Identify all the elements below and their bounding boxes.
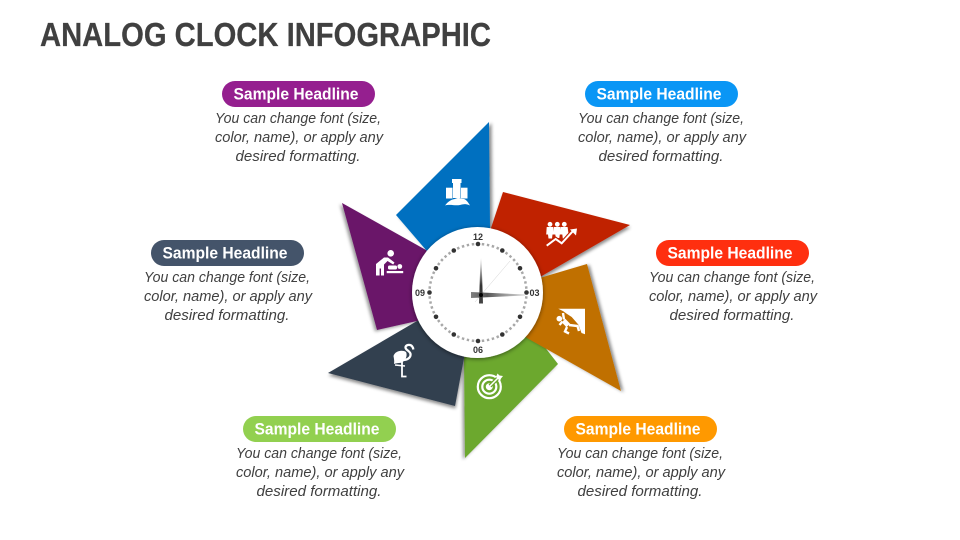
description: desired formatting. bbox=[236, 148, 360, 165]
callout: middle left bbox=[144, 240, 313, 324]
clock numerals bbox=[415, 232, 540, 355]
description: You can change font (size, bbox=[144, 269, 310, 286]
clock numerals: 03 bbox=[529, 288, 540, 298]
description: desired formatting. bbox=[598, 148, 724, 165]
description bbox=[144, 269, 313, 324]
callout: bottom left: Sample Headline bbox=[254, 420, 380, 438]
headline pill bbox=[564, 416, 717, 442]
clock face bbox=[412, 227, 543, 358]
icon: flamingo bbox=[394, 345, 413, 376]
description: color, name), or apply any bbox=[144, 288, 313, 305]
description bbox=[557, 445, 726, 500]
description: You can change font (size, bbox=[236, 445, 402, 462]
callout: middle right bbox=[649, 240, 818, 324]
description: You can change font (size, bbox=[215, 110, 381, 127]
title: ANALOG CLOCK INFOGRAPHIC bbox=[40, 16, 491, 53]
headline pill bbox=[656, 240, 809, 266]
description: You can change font (size, bbox=[557, 445, 723, 462]
panel: navy wedge bbox=[328, 293, 478, 406]
description: You can change font (size, bbox=[649, 269, 815, 286]
panel: purple wedge bbox=[342, 203, 478, 330]
description: You can change font (size, bbox=[578, 110, 744, 127]
minute ticks bbox=[430, 244, 526, 341]
callout: bottom right bbox=[557, 416, 726, 500]
center pin bbox=[479, 293, 483, 297]
description: color, name), or apply any bbox=[578, 129, 747, 146]
callout: top right: Sample Headline bbox=[596, 84, 722, 104]
hour dots bbox=[427, 242, 529, 343]
panel: red wedge bbox=[478, 192, 630, 293]
callout: top left: Sample Headline bbox=[234, 84, 358, 104]
callout: bottom right: Sample Headline bbox=[576, 420, 700, 438]
description: color, name), or apply any bbox=[215, 129, 384, 146]
description bbox=[215, 110, 384, 165]
icon: target with arrow bbox=[478, 374, 503, 398]
callout: top right bbox=[578, 81, 747, 165]
headline pill bbox=[585, 81, 738, 107]
icon: parent changing baby bbox=[376, 250, 403, 276]
description: desired formatting. bbox=[256, 483, 382, 500]
description: color, name), or apply any bbox=[557, 464, 726, 481]
headline pill bbox=[151, 240, 304, 266]
panel: green wedge bbox=[464, 293, 558, 458]
description: desired formatting. bbox=[578, 483, 702, 500]
description: color, name), or apply any bbox=[236, 464, 405, 481]
second hand bbox=[475, 261, 510, 302]
description: color, name), or apply any bbox=[649, 288, 818, 305]
icon: climber on wall bbox=[556, 309, 585, 334]
callout: bottom left bbox=[236, 416, 405, 500]
clock numerals: 06 bbox=[473, 345, 483, 355]
panel: blue wedge bbox=[396, 122, 490, 293]
clock numerals: 12 bbox=[473, 232, 483, 242]
description bbox=[649, 269, 818, 324]
clock numerals: 09 bbox=[415, 288, 425, 298]
minute hand bbox=[471, 292, 525, 298]
icon: castle bbox=[445, 179, 470, 206]
description bbox=[236, 445, 405, 500]
callout: top left bbox=[215, 81, 384, 165]
description bbox=[578, 110, 747, 165]
hour hand bbox=[479, 258, 483, 304]
callout: middle right: Sample Headline bbox=[668, 244, 792, 262]
headline pill bbox=[222, 81, 375, 107]
description: desired formatting. bbox=[670, 307, 794, 324]
panel: orange wedge bbox=[478, 264, 621, 391]
icon: people with rising arrow bbox=[546, 222, 577, 246]
description: desired formatting. bbox=[164, 307, 290, 324]
callout: middle left: Sample Headline bbox=[162, 244, 288, 262]
headline pill bbox=[243, 416, 396, 442]
clock bbox=[412, 227, 543, 358]
